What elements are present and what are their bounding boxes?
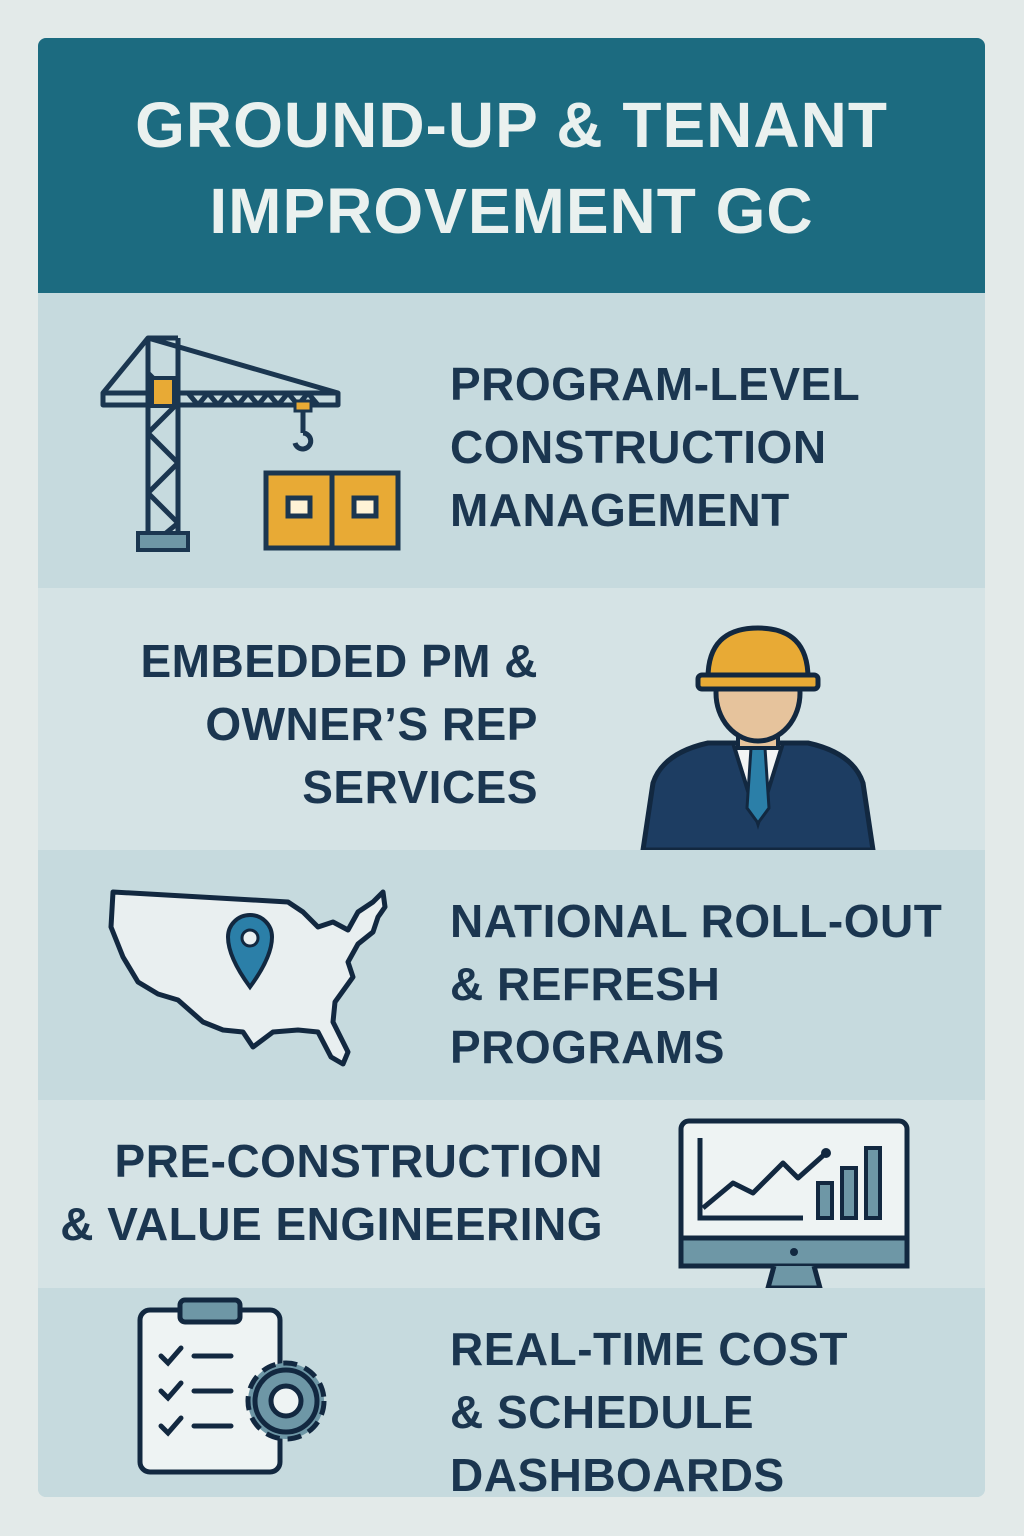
text: embedded PM & owner's rep services: OWNER’S REP (205, 698, 538, 750)
text: national roll-out & refresh programs (450, 895, 942, 1073)
title: GROUND-UP & TENANT (135, 89, 888, 161)
text: program-level construction management: PROGRAM-LEVEL (450, 358, 860, 410)
title: IMPROVEMENT GC (209, 175, 814, 247)
title (38, 38, 985, 293)
text: pre-construction & value engineering: & VALUE ENGINEERING (60, 1198, 603, 1250)
panel: national roll-out (38, 850, 985, 1100)
text: program-level construction management: CONSTRUCTION (450, 421, 827, 473)
text: real-time cost & schedule dashboards: REAL-TIME COST (450, 1323, 848, 1375)
panel: embedded PM (38, 588, 985, 850)
icon: clipboard with gear (138, 1298, 326, 1474)
text: program-level construction management (450, 358, 860, 536)
panel: real-time dashboards (38, 1288, 985, 1497)
icon: monitor chart (678, 1118, 910, 1288)
text: real-time cost & schedule dashboards: & SCHEDULE (450, 1386, 754, 1438)
icon: US map with pin (108, 890, 388, 1066)
text: embedded PM & owner's rep services: SERVICES (302, 761, 538, 813)
text: pre-construction & value engineering (60, 1135, 603, 1250)
panel: construction management (38, 293, 985, 588)
text: real-time cost & schedule dashboards (450, 1323, 848, 1497)
icon: crane (100, 336, 400, 552)
text: national roll-out & refresh programs: NATIONAL ROLL-OUT (450, 895, 942, 947)
icon: engineer (640, 626, 876, 850)
text: national roll-out & refresh programs: PROGRAMS (450, 1021, 725, 1073)
text: program-level construction management: MANAGEMENT (450, 484, 790, 536)
panel: pre-construction (38, 1100, 985, 1288)
text: embedded PM & owner's rep services (140, 635, 538, 813)
text: pre-construction & value engineering: PRE-CONSTRUCTION (115, 1135, 603, 1187)
text: national roll-out & refresh programs: & REFRESH (450, 958, 720, 1010)
text: embedded PM & owner's rep services: EMBEDDED PM & (140, 635, 538, 687)
